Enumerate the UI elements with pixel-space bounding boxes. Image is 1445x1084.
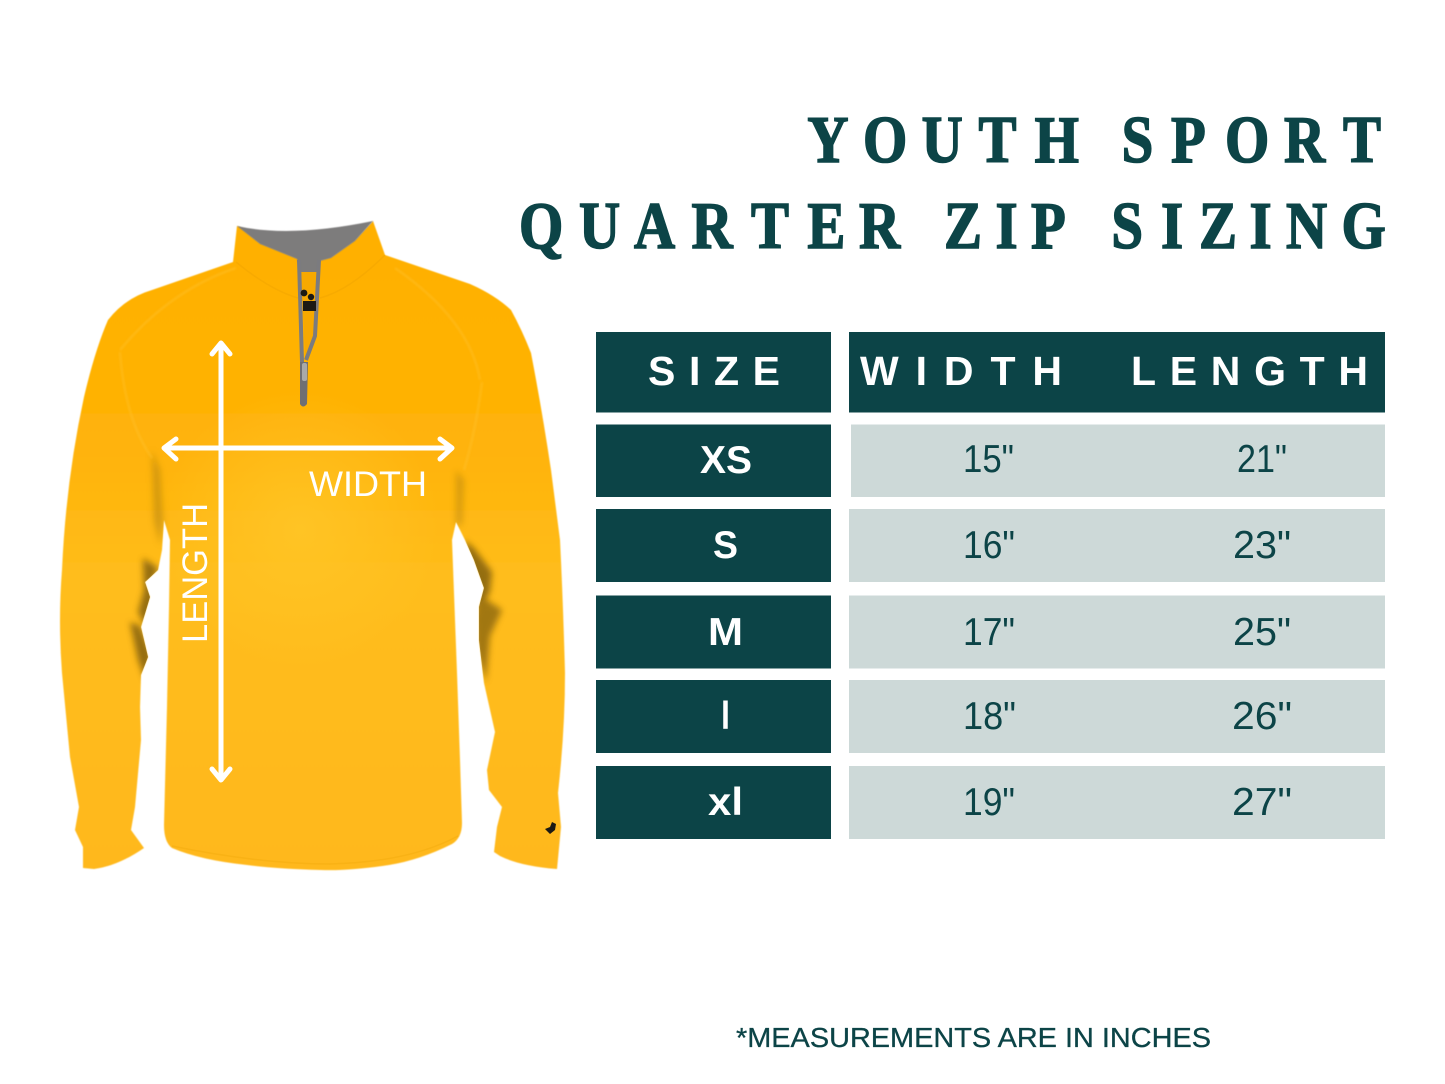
- row: M: [596, 596, 1385, 668]
- row: xl: 19": [963, 781, 1015, 824]
- row: xl: xl: [708, 781, 743, 824]
- title: [519, 104, 1386, 263]
- sleeve creases and seams: [120, 255, 502, 864]
- icon: yellow quarter zip shirt: [60, 221, 565, 870]
- row: l: [596, 680, 1385, 753]
- header: width and length: [849, 332, 1385, 412]
- sizing chart infographic: [59, 116, 1385, 1048]
- row: S: 23": [1233, 524, 1291, 567]
- header: size: SIZE: [648, 348, 780, 394]
- zipper lower closed section: [300, 362, 308, 406]
- row: l: 18": [963, 695, 1016, 738]
- row: XS: 15": [963, 438, 1014, 481]
- row: S: [596, 509, 1385, 582]
- title line 2: QUARTER ZIP SIZING: [519, 190, 1386, 263]
- header: width and length: WIDTH: [860, 348, 1062, 394]
- row: M: 25": [1233, 611, 1291, 654]
- zipper tape right: [306, 260, 319, 360]
- header: size: [596, 332, 831, 412]
- arrow: length: [212, 343, 230, 780]
- row: l: l: [721, 695, 730, 738]
- panel: size table: [596, 332, 1385, 839]
- footnote: *MEASUREMENTS ARE IN INCHES: [736, 1022, 1211, 1053]
- row: XS: [596, 424, 1385, 497]
- shirt body: [60, 221, 565, 870]
- row: l: 26": [1232, 695, 1292, 738]
- row: XS: 21": [1237, 438, 1287, 481]
- cuff logo: [545, 822, 556, 834]
- row: S: S: [713, 524, 738, 567]
- neck logo: [301, 290, 316, 311]
- chest highlight: [170, 390, 455, 680]
- title line 1: YOUTH SPORT: [807, 104, 1381, 177]
- row: S: 16": [963, 524, 1015, 567]
- header: width and length: LENGTH: [1131, 348, 1368, 394]
- inner collar: [237, 221, 373, 274]
- arrow: width: [164, 439, 452, 459]
- label: length: LENGTH: [176, 503, 215, 643]
- row: M: 17": [963, 611, 1015, 654]
- zipper pull: [302, 363, 307, 381]
- placket inner yellow: [301, 272, 319, 358]
- row: XS: XS: [700, 439, 752, 482]
- row: xl: 27": [1232, 781, 1292, 824]
- zipper tape left: [299, 260, 302, 362]
- label: width: WIDTH: [309, 465, 427, 504]
- row: M: M: [708, 611, 743, 654]
- row: xl: [596, 766, 1385, 839]
